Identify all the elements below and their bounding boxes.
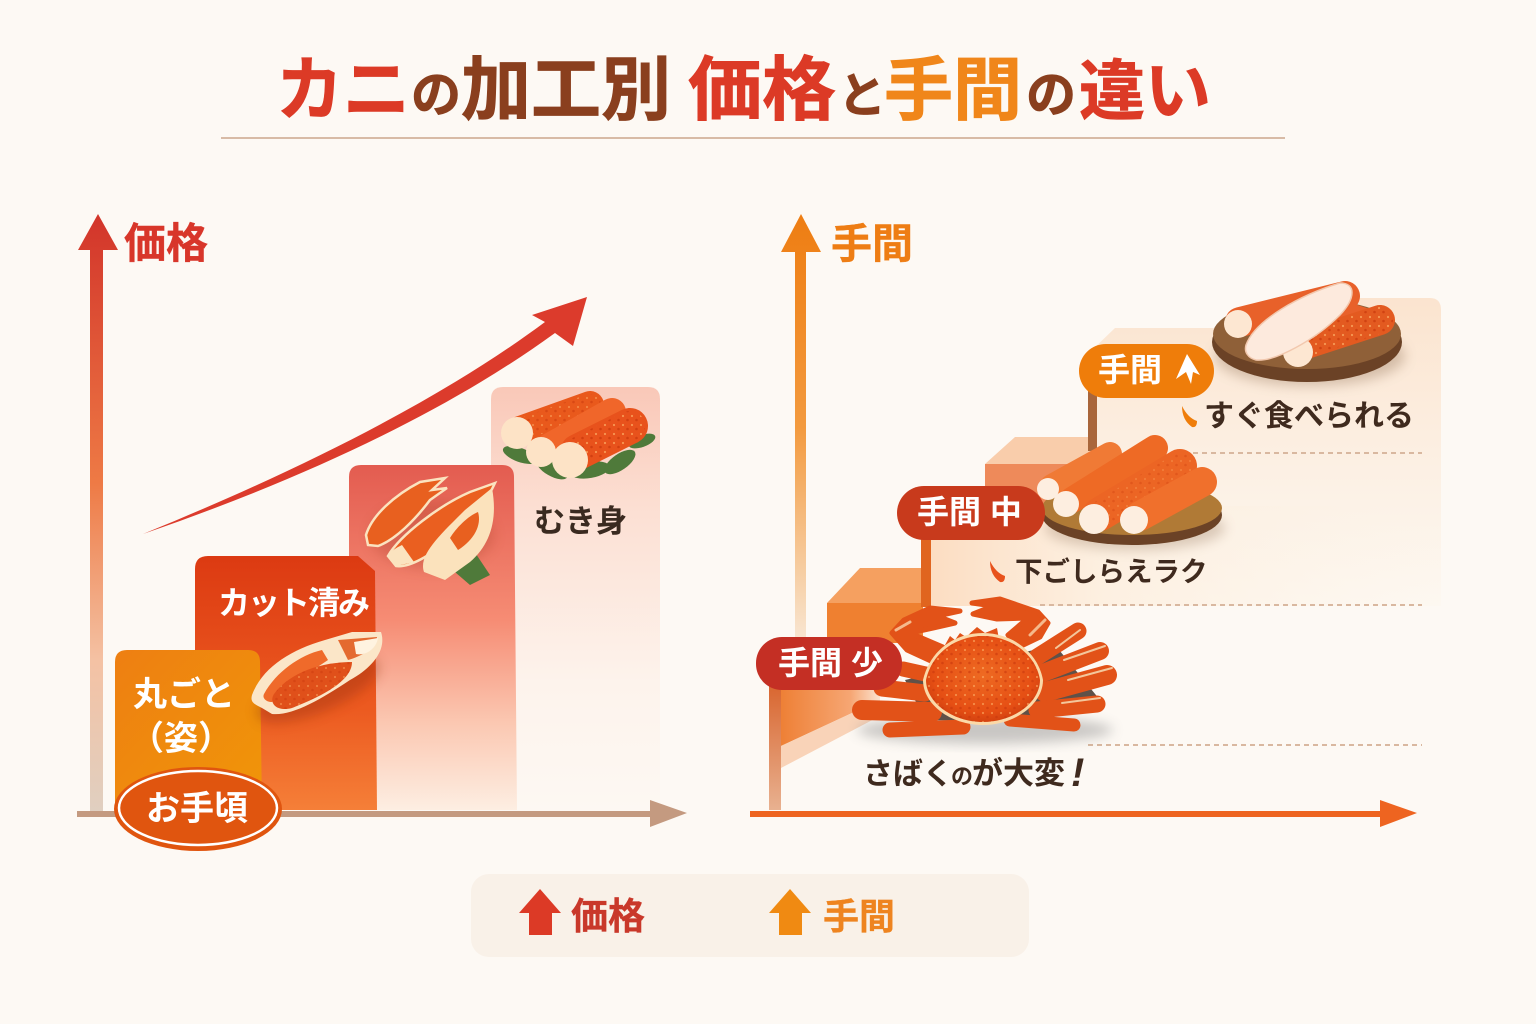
panel: effort chart	[750, 214, 1441, 827]
x axis arrow: effort chart	[750, 800, 1417, 827]
legend label: price: 価格	[571, 896, 645, 937]
title: カニ	[276, 51, 410, 129]
rising trend arrow	[143, 297, 587, 534]
stairs: top step	[1090, 298, 1441, 606]
title: の	[1026, 67, 1076, 123]
crab shell spikes	[945, 627, 1000, 645]
caption: さばくのが大変: の	[951, 764, 973, 789]
crab leg highlights	[1056, 630, 1112, 703]
title: 加工別	[461, 51, 671, 129]
crab under-shadow	[905, 645, 1100, 722]
y axis arrow: effort	[781, 214, 821, 640]
label: 丸ごと（姿）: （姿）	[130, 720, 232, 758]
bar: whole	[115, 650, 262, 810]
panel: price chart	[77, 214, 687, 851]
title	[276, 51, 1211, 129]
label pill: effort medium	[897, 486, 1045, 540]
bar: unnamed third step	[349, 465, 517, 810]
food: plate with shelled legs	[1212, 283, 1405, 386]
dashed guide lines	[1040, 453, 1422, 745]
title: の	[411, 67, 461, 123]
crab shell rim	[923, 633, 1043, 725]
title divider	[221, 137, 1285, 139]
title: と	[838, 70, 886, 123]
badge: お手頃: お手頃	[146, 790, 248, 828]
crab legs	[862, 631, 1107, 730]
title: 違い	[1079, 54, 1211, 128]
title: 手間	[884, 52, 1022, 129]
caption: さばくのが大変: !	[1071, 751, 1084, 795]
crab claw highlights	[896, 620, 1045, 635]
crab shell	[926, 636, 1040, 722]
caption: さばくのが大変	[863, 751, 1084, 795]
label pill: effort up: 手間	[1098, 352, 1162, 388]
caption: さばくのが大変: が大変	[972, 756, 1065, 791]
stairs: middle step	[923, 437, 1440, 606]
axis label: effort: 手間	[831, 221, 913, 267]
label: 丸ごと（姿）: 丸ごと	[133, 676, 235, 714]
label pill: effort small	[756, 637, 902, 690]
food: plate with crab sticks	[1037, 448, 1225, 550]
crab shell speckle	[926, 636, 1040, 722]
caption: さばくのが大変: さばく	[863, 758, 953, 791]
x axis arrow: price chart	[77, 800, 687, 827]
label pill: effort up	[1079, 344, 1214, 398]
step risers	[769, 385, 1097, 810]
food: cut claw	[249, 632, 387, 736]
icon: effort arrow	[769, 889, 811, 935]
bar: cut	[195, 556, 377, 810]
label pill: effort medium: 手間 中	[917, 494, 1022, 530]
badge: お手頃	[114, 767, 282, 851]
crab claws	[892, 599, 1048, 662]
title: 価格	[688, 51, 836, 129]
caption: すぐ食べられる: すぐ食べられる	[1204, 400, 1414, 433]
food: half-shell legs	[366, 478, 495, 585]
label: 丸ごと（姿）	[130, 676, 235, 758]
y axis arrow: price	[78, 214, 118, 811]
legend	[471, 874, 1029, 957]
food: shelled legs on leaves	[501, 405, 657, 484]
axis label: price: 価格	[124, 220, 208, 267]
label pill: effort small: 手間 少	[778, 645, 883, 681]
icon: price arrow	[519, 889, 561, 935]
label: カット清み: カット清み	[218, 585, 370, 621]
bar: shelled meat	[491, 387, 660, 810]
stairs: bottom step	[781, 568, 923, 768]
caption: 下ごしらえラク: 下ごしらえラク	[1015, 556, 1208, 587]
legend label: effort: 手間	[823, 896, 895, 937]
icon: whole crab	[857, 599, 1113, 744]
label: むき身: むき身	[534, 504, 627, 539]
